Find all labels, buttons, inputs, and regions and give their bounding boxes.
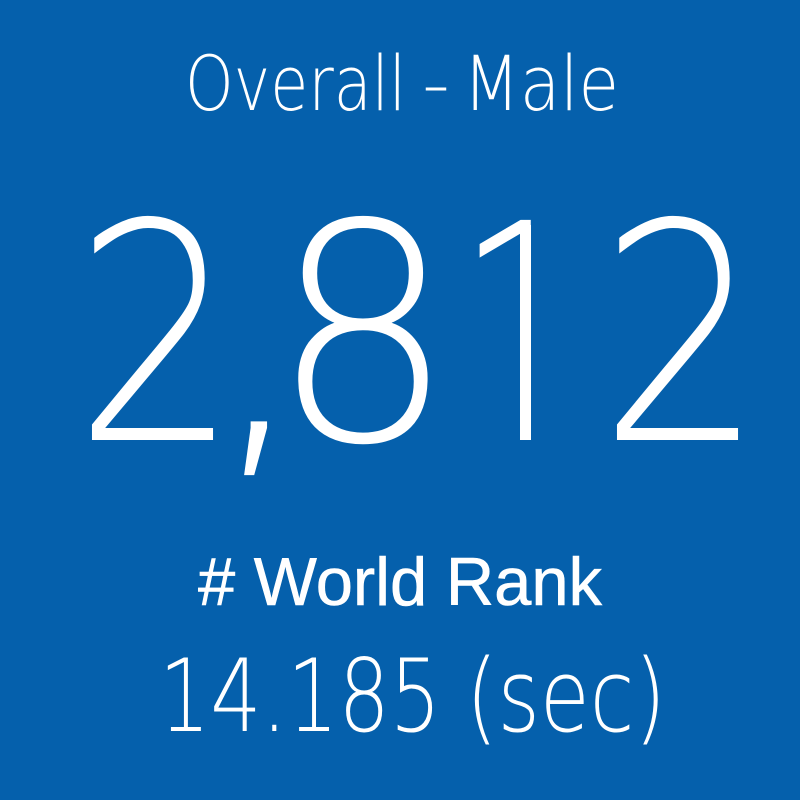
main number: 2,812: 2	[74, 161, 239, 512]
main number: 2,812: ,	[206, 161, 312, 512]
title: Overall - Male: Male	[463, 39, 619, 128]
label: # World Rank: # World Rank	[198, 544, 603, 620]
main number: 2,812	[74, 161, 764, 512]
main number: 2,812: 1	[457, 161, 588, 512]
value: 14.185 (sec): (sec)	[466, 637, 666, 755]
main number: 2,812: 2	[599, 161, 764, 512]
title: Overall - Male: -	[422, 39, 450, 128]
title: Overall - Male: Overall	[185, 39, 406, 128]
main number: 2,812: 8	[271, 161, 455, 512]
value: 14.185 (sec): 14.185	[159, 637, 441, 755]
